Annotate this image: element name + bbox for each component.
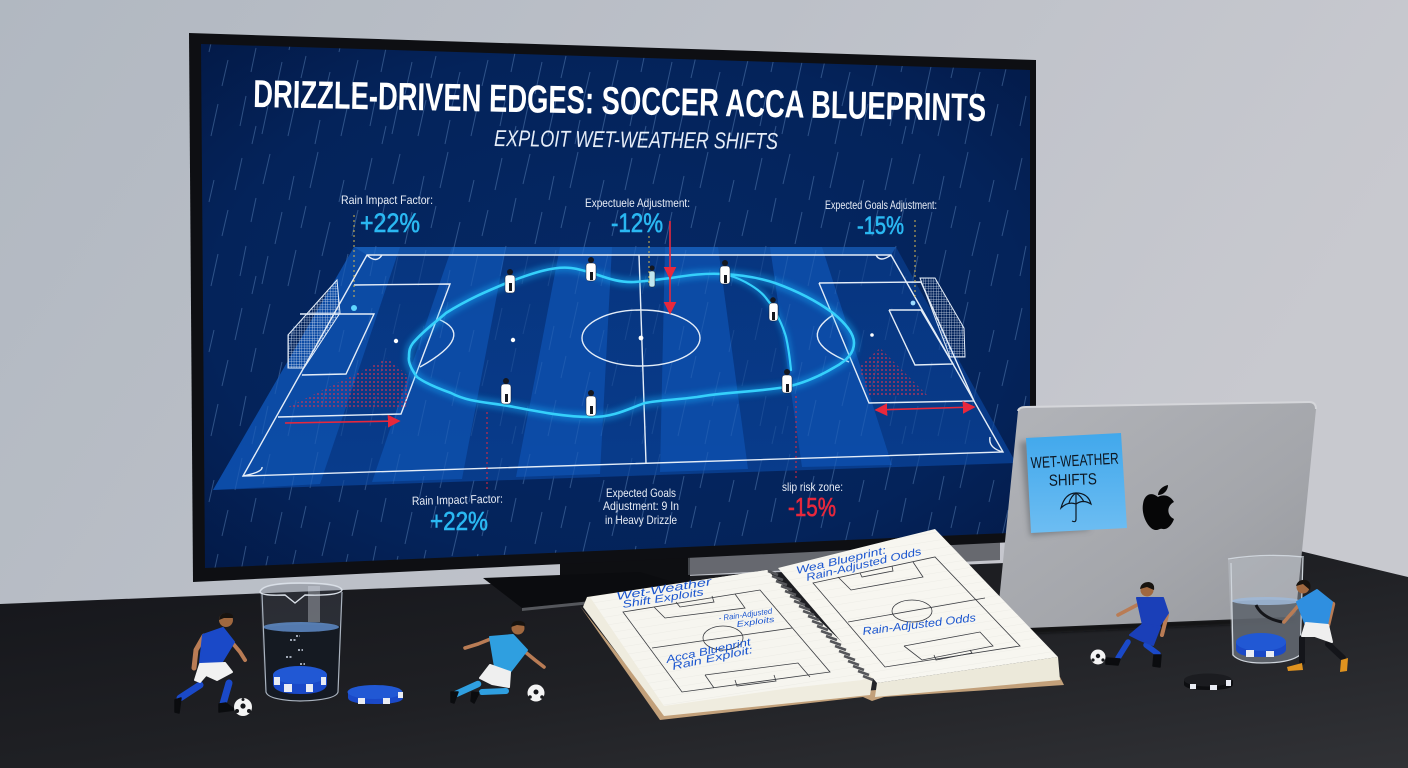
left page block <box>583 570 873 716</box>
figurine: cyan player sliding <box>451 621 544 703</box>
stat: adjustment top centre: -12% <box>611 208 663 238</box>
right handwriting: Rain-Adjusted Odds <box>862 612 977 638</box>
black poker chip <box>1184 674 1233 690</box>
stat: adjustment top centre <box>585 196 690 238</box>
apple logo <box>1143 485 1174 530</box>
stat: adjustment top centre: Expectuele Adjustment: <box>585 196 690 210</box>
tactical pitch <box>213 215 1016 490</box>
stat: rain impact factor bottom: +22% <box>430 506 488 536</box>
red slip zone right <box>859 348 927 397</box>
stat: expected goals bottom centre: Adjustment: 9 In <box>603 499 679 513</box>
spiral binding <box>768 571 873 680</box>
beaker with chip right <box>1228 555 1304 663</box>
subtitle: EXPLOIT WET-WEATHER SHIFTS <box>494 125 779 154</box>
stat: rain impact factor bottom <box>412 492 503 536</box>
figurine: cyan player at beaker <box>1284 580 1348 672</box>
football <box>528 684 544 702</box>
left handwriting: Acca Blueprint <box>664 636 753 666</box>
right page <box>778 529 1058 683</box>
figurine: blue player right <box>1090 582 1168 667</box>
sticky note <box>1020 433 1127 536</box>
football <box>1090 650 1106 664</box>
right handwriting: Wea Blueprint: <box>795 545 887 577</box>
left handwriting: Wet-Weather <box>616 576 714 603</box>
right goal net <box>920 278 965 357</box>
pitch markers <box>351 301 915 343</box>
left handwriting: Exploits <box>736 615 775 629</box>
monitor screen <box>201 44 1030 568</box>
title: DRIZZLE-DRIVEN EDGES: SOCCER ACCA BLUEPRINTS <box>253 73 987 130</box>
player tokens <box>501 257 792 416</box>
left goal net <box>288 280 340 368</box>
left handwriting: Shift Exploits <box>622 586 705 611</box>
desk surface <box>0 551 1408 768</box>
left pitch sketch <box>623 590 830 692</box>
notebook <box>580 529 1064 720</box>
notebook cover <box>580 606 1064 720</box>
figurine: blue player with ball left <box>175 613 252 716</box>
red arrows <box>285 221 974 423</box>
sticky note: WET-WEATHER <box>1030 451 1119 472</box>
stat: expected goals top right: Expected Goals Adjustment: <box>825 198 937 212</box>
stat: slip risk zone <box>782 480 843 522</box>
stat: expected goals top right: -15% <box>857 212 904 240</box>
pitch base <box>213 247 1016 490</box>
left page <box>590 570 873 706</box>
beaker with chip left <box>260 583 342 701</box>
stat: slip risk zone: slip risk zone: <box>782 480 843 494</box>
right page block <box>875 657 1060 697</box>
poker chip in water <box>1236 633 1286 657</box>
stat: slip risk zone: -15% <box>788 492 836 522</box>
monitor <box>189 33 1036 611</box>
sticky note: SHIFTS <box>1049 471 1097 490</box>
stat: rain impact factor top: Rain Impact Factor: <box>341 193 433 207</box>
right pitch sketch <box>813 557 1020 667</box>
red slip zone left <box>284 358 409 409</box>
stat: expected goals top right <box>825 198 937 240</box>
pitch lines <box>243 255 1003 476</box>
laptop <box>997 402 1316 635</box>
poker chip in water <box>273 666 327 694</box>
stat: rain impact factor top: +22% <box>360 208 420 238</box>
icon: umbrella <box>1061 493 1091 522</box>
right handwriting <box>795 545 977 638</box>
monitor stand <box>483 540 1000 611</box>
left handwriting <box>616 576 775 673</box>
poker chip on desk <box>348 685 403 704</box>
stat: expected goals bottom centre: in Heavy Drizzle <box>605 513 677 527</box>
pitch stripes <box>213 247 892 490</box>
stat: rain impact factor bottom: Rain Impact Factor: <box>412 492 503 508</box>
monitor bezel <box>189 33 1036 582</box>
stat: expected goals bottom centre <box>603 486 679 527</box>
stat: rain impact factor top <box>341 193 433 238</box>
football <box>234 698 252 716</box>
stat: expected goals bottom centre: Expected Goals <box>606 486 676 500</box>
right handwriting: Rain-Adjusted Odds <box>805 545 924 584</box>
dotted leader lines <box>354 215 915 490</box>
rain streaks <box>201 44 1030 568</box>
neon wet-weather curve <box>409 268 854 417</box>
left handwriting: - Rain-Adjusted <box>718 606 773 623</box>
left handwriting: Rain Exploit: <box>671 644 754 673</box>
